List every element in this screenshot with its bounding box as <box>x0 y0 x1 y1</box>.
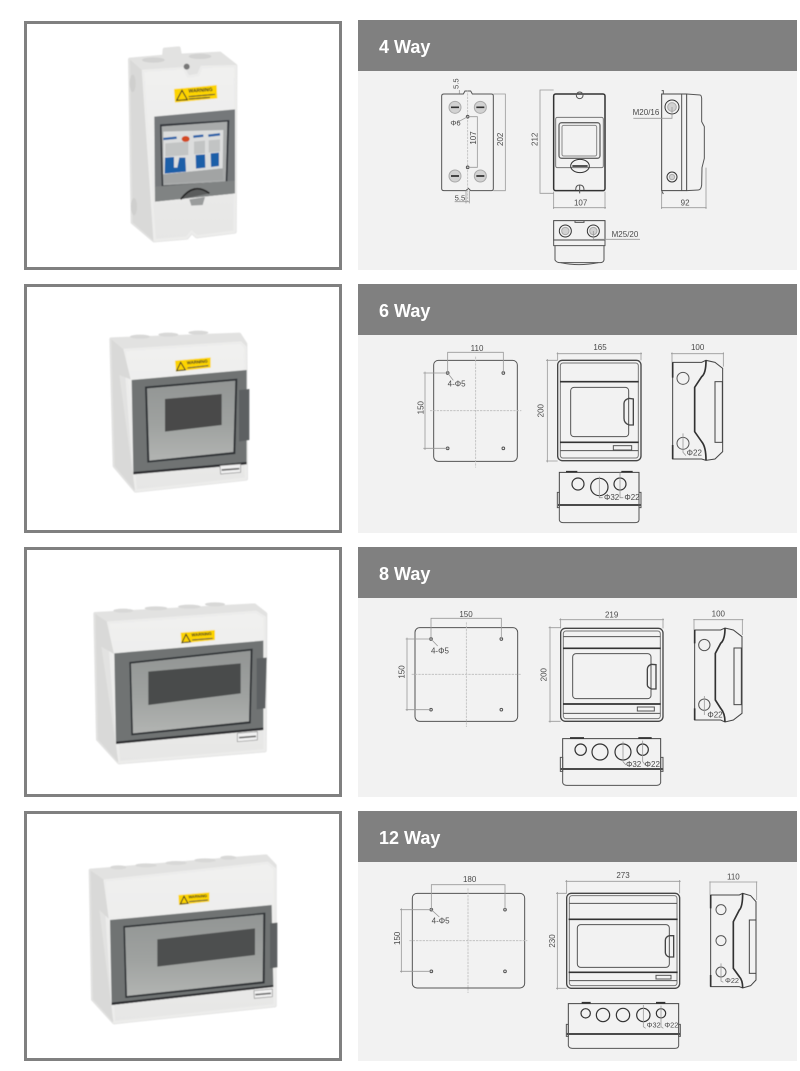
photo: 12 way enclosure <box>91 856 277 1022</box>
bottom view drawing <box>554 221 640 265</box>
dimension drawings: 12 way <box>393 871 757 1048</box>
side view drawing: M20/16 <box>633 108 660 117</box>
panel: 6 way specification <box>358 284 797 533</box>
front view drawing: 107 <box>574 199 588 208</box>
side view drawing: 100 <box>691 343 705 352</box>
header: 12 way <box>358 811 797 862</box>
warning label <box>175 357 211 372</box>
dimension drawings: 8 way <box>398 610 743 785</box>
side view drawing: Φ22 <box>725 976 739 985</box>
front view drawing <box>548 871 681 990</box>
dimension drawings: 6 way <box>417 343 724 523</box>
panel: 8 way photo <box>26 548 340 796</box>
header: 6 way: 6 Way <box>379 301 430 321</box>
bottom view drawing <box>560 738 663 785</box>
bottom view drawing: Φ32 <box>626 760 642 769</box>
back plate drawing: 150 <box>459 610 473 619</box>
side view drawing: 110 <box>727 872 740 881</box>
front view drawing: 212 <box>531 132 540 146</box>
panel: 4 way specification <box>358 20 797 270</box>
back plate drawing: 110 <box>471 344 484 353</box>
back plate drawing: 150 <box>393 931 402 945</box>
header: 4 way <box>358 20 797 71</box>
front view drawing <box>531 90 606 209</box>
bottom view drawing: Φ32 <box>604 493 620 502</box>
bottom view drawing <box>566 1003 680 1048</box>
photo: 6 way enclosure <box>111 331 249 491</box>
side view drawing <box>671 343 724 460</box>
header: 6 way <box>358 284 797 335</box>
back plate drawing <box>393 875 527 993</box>
front view drawing: 200 <box>539 667 548 681</box>
dimension drawings: 4 way <box>442 78 707 265</box>
warning label: WARNING <box>188 87 213 95</box>
back plate drawing: 150 <box>417 400 426 414</box>
warning label <box>181 630 215 643</box>
panel: 12 way photo <box>26 812 340 1060</box>
side view drawing: 92 <box>681 199 690 208</box>
back plate drawing: 180 <box>463 875 477 884</box>
photo: 4 way enclosure <box>130 48 235 240</box>
bottom view drawing <box>557 472 641 523</box>
front view drawing: 200 <box>537 403 546 417</box>
side view drawing <box>633 91 707 209</box>
panel: 4 way photo <box>26 22 340 268</box>
front view drawing: 219 <box>605 611 619 620</box>
bottom view drawing: Φ22 <box>645 760 660 769</box>
back plate drawing: 5.5 <box>455 193 465 202</box>
back plate drawing: 4-Φ5 <box>432 917 450 926</box>
warning label <box>178 892 209 905</box>
back plate drawing: 150 <box>398 665 407 679</box>
panel: 8 way specification <box>358 547 797 797</box>
side view drawing: Φ22 <box>707 711 723 720</box>
warning label <box>174 85 217 103</box>
bottom view drawing: M25/20 <box>612 230 639 239</box>
header: 12 way: 12 Way <box>379 828 440 848</box>
header: 8 way: 8 Way <box>379 564 430 584</box>
back plate drawing <box>398 610 521 727</box>
panel: 6 way photo <box>26 286 340 532</box>
back plate drawing: Φ6 <box>450 118 461 127</box>
back plate drawing: 202 <box>496 132 505 146</box>
side view drawing: 100 <box>712 610 726 619</box>
back plate drawing: 4-Φ5 <box>431 646 449 655</box>
warning label: WARNING <box>188 894 207 899</box>
side view drawing: Φ22 <box>687 449 702 458</box>
warning label: WARNING <box>187 358 209 365</box>
front view drawing: 230 <box>548 934 557 948</box>
bottom view drawing: Φ32 <box>647 1021 661 1030</box>
photo: 8 way enclosure <box>95 602 267 762</box>
side view drawing <box>693 610 743 722</box>
back plate drawing: 107 <box>469 131 478 145</box>
panel: 12 way specification <box>358 811 797 1061</box>
back plate drawing <box>442 78 505 203</box>
header: 8 way <box>358 547 797 598</box>
bottom view drawing: Φ22 <box>664 1021 678 1030</box>
back plate drawing: 4-Φ5 <box>448 379 466 388</box>
front view drawing <box>537 343 642 462</box>
back plate drawing <box>417 344 521 468</box>
front view drawing: 165 <box>593 343 607 352</box>
front view drawing: 273 <box>616 871 630 880</box>
bottom view drawing: Φ22 <box>624 493 640 502</box>
back plate drawing: 5.5 <box>451 78 460 89</box>
header: 4 way: 4 Way <box>379 37 430 57</box>
warning label: WARNING <box>191 631 212 637</box>
front view drawing <box>539 611 664 723</box>
side view drawing <box>709 872 757 988</box>
